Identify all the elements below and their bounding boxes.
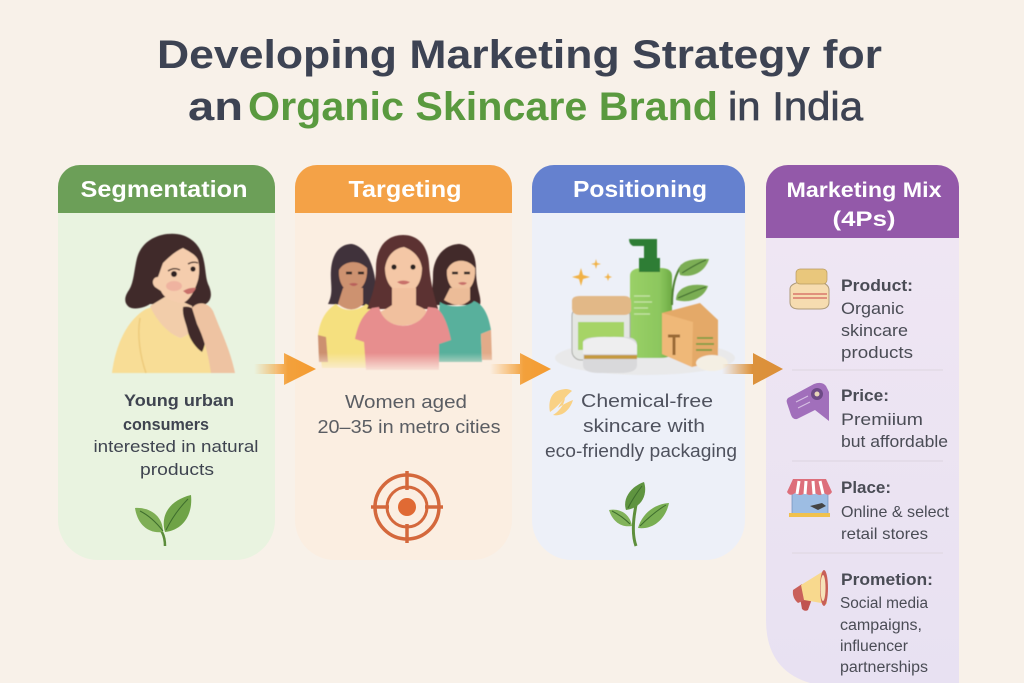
item: place xyxy=(787,479,950,543)
icon: target xyxy=(371,471,443,543)
title: in India xyxy=(728,85,864,129)
product text: Organic xyxy=(841,300,904,318)
panel: targeting xyxy=(295,165,512,560)
text: young urban consumers: Young urban xyxy=(124,391,234,410)
illustration: skincare products xyxy=(555,239,735,375)
promotion text: Prometion: xyxy=(841,571,933,589)
soap xyxy=(696,355,728,371)
text: young urban consumers xyxy=(94,391,258,479)
promotion text: Social media xyxy=(840,595,928,612)
icon: cream jar xyxy=(790,269,829,309)
promotion text: partnerships xyxy=(840,659,928,676)
segmentation header xyxy=(58,165,275,213)
icon: leaves xyxy=(135,495,191,546)
icon: price tag xyxy=(787,383,829,421)
title: Organic Skincare Brand xyxy=(248,85,718,129)
text: chemical-free xyxy=(545,389,737,461)
item: product xyxy=(790,269,913,362)
place text: retail stores xyxy=(841,526,928,543)
arrow: targeting to positioning xyxy=(490,353,551,385)
targeting header xyxy=(295,165,512,213)
title: Developing Marketing Strategy for xyxy=(157,33,882,77)
icon: orange swirl xyxy=(549,389,573,415)
title: an xyxy=(188,85,243,129)
promotion text: campaigns, xyxy=(840,617,922,634)
text: young urban consumers: interested in natural xyxy=(94,437,258,456)
place text: Place: xyxy=(841,479,891,497)
text: chemical-free: eco-friendly packaging xyxy=(545,440,737,461)
marketing mix header: (4Ps) xyxy=(832,208,896,231)
promotion text xyxy=(840,571,933,676)
sparkles xyxy=(572,259,612,286)
price text: Price: xyxy=(841,387,889,405)
panel: positioning xyxy=(532,165,745,560)
product text: products xyxy=(841,344,913,362)
text: women aged: 20–35 in metro cities xyxy=(318,416,500,437)
title xyxy=(157,33,882,129)
jar xyxy=(572,307,630,360)
icon: sprig xyxy=(609,482,669,546)
text: young urban consumers: products xyxy=(140,460,214,479)
positioning header xyxy=(532,165,745,213)
price text: but affordable xyxy=(841,433,948,451)
item: promotion xyxy=(793,570,933,676)
arrow: segmentation to targeting xyxy=(254,353,316,385)
panel: segmentation xyxy=(58,165,275,560)
text: chemical-free: skincare with xyxy=(583,415,705,436)
icon: megaphone xyxy=(793,570,828,611)
place text: Online & select xyxy=(841,504,950,521)
marketing mix header xyxy=(766,165,959,238)
promotion text: influencer xyxy=(840,638,908,655)
panel: marketing mix xyxy=(766,165,959,683)
price text: Premiium xyxy=(841,411,923,429)
icon: shop xyxy=(787,479,832,517)
targeting header: Targeting xyxy=(348,176,462,202)
text: women aged xyxy=(318,391,500,437)
item: price xyxy=(787,383,948,451)
small jar xyxy=(583,337,637,373)
text: chemical-free: Chemical-free xyxy=(581,390,713,411)
text: women aged: Women aged xyxy=(345,391,467,412)
illustration: thoughtful woman xyxy=(112,234,235,373)
arrow: positioning to marketing mix xyxy=(722,353,783,385)
product text: skincare xyxy=(841,322,908,340)
green bottle xyxy=(630,268,672,358)
positioning header: Positioning xyxy=(573,176,707,202)
product text xyxy=(841,277,913,362)
text: young urban consumers: consumers xyxy=(123,415,209,434)
marketing mix header: Marketing Mix xyxy=(786,179,942,202)
segmentation header: Segmentation xyxy=(80,176,248,202)
leaves xyxy=(672,265,682,305)
kraft box xyxy=(662,303,718,367)
illustration: three women xyxy=(315,235,500,373)
place text xyxy=(841,479,950,543)
price text xyxy=(841,387,948,451)
product text: Product: xyxy=(841,277,913,295)
